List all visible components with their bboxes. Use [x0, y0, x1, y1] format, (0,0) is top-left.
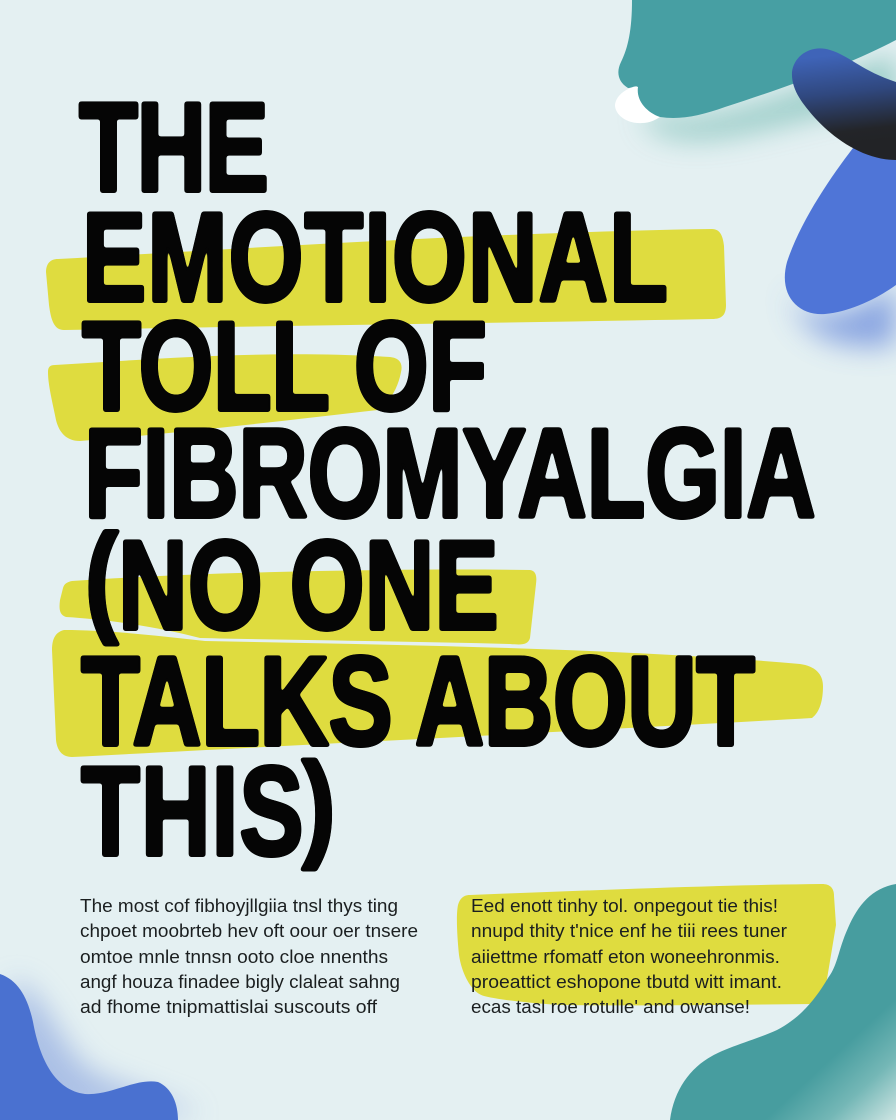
text block: left paragraph: ad fhome tnipmattislai suscouts off — [80, 996, 378, 1017]
highlight: yellow swash TALKS ABOUT — [52, 630, 823, 757]
title: EMOTIONAL — [82, 186, 668, 328]
text block: left paragraph: angf houza finadee bigly claleat sahng — [80, 971, 400, 992]
highlight: yellow swash NO ONE — [60, 569, 536, 644]
title: FIBROMYALGIA — [84, 402, 816, 544]
title: ) — [302, 739, 335, 871]
text block: left paragraph — [80, 895, 418, 1017]
text block: left paragraph: chpoet moobrteb hev oft oour oer tnsere — [80, 920, 418, 941]
title: THIS — [81, 740, 304, 882]
text block: right paragraph: ecas tasl roe rotulle' and owanse! — [471, 996, 750, 1017]
text block: right paragraph — [471, 895, 787, 1017]
title: TALKS ABOUT — [81, 630, 755, 772]
title — [79, 76, 816, 882]
glow: teal shadow — [640, 55, 896, 139]
shape: bottom-left blue blob — [0, 974, 178, 1120]
shape: top teal blob — [618, 0, 896, 118]
shape: bottom-right teal blob — [670, 884, 896, 1120]
panel: yellow callout background — [457, 884, 836, 1005]
text block: right paragraph: proeattict eshopone tbutd witt imant. — [471, 971, 782, 992]
shape: dark navy blob — [792, 48, 896, 160]
text block: right paragraph: nnupd thity t'nice enf he tiii rees tuner — [471, 920, 787, 941]
text block: right paragraph: aiiettme rfomatf eton woneehronmis. — [471, 946, 780, 967]
glow: blue shadow — [784, 270, 896, 346]
highlight: yellow swash EMOTIONAL — [46, 229, 726, 330]
highlight: yellow swash TOLL OF — [48, 354, 402, 441]
text block: left paragraph: The most cof fibhoyjllgiia tnsl thys ting — [80, 895, 398, 916]
title: NO ONE — [118, 514, 499, 656]
shape: white crescent — [615, 86, 660, 123]
text block: left paragraph: omtoe mnle tnnsn ooto cloe nnenths — [80, 946, 388, 967]
title: TOLL OF — [82, 295, 487, 437]
text block: right paragraph: Eed enott tinhy tol. onpegout tie this! — [471, 895, 778, 916]
title: ( — [85, 509, 119, 645]
shape: blue blob — [785, 148, 896, 314]
glow: bottom-left blue shadow — [12, 979, 202, 1114]
title: THE — [79, 76, 269, 218]
